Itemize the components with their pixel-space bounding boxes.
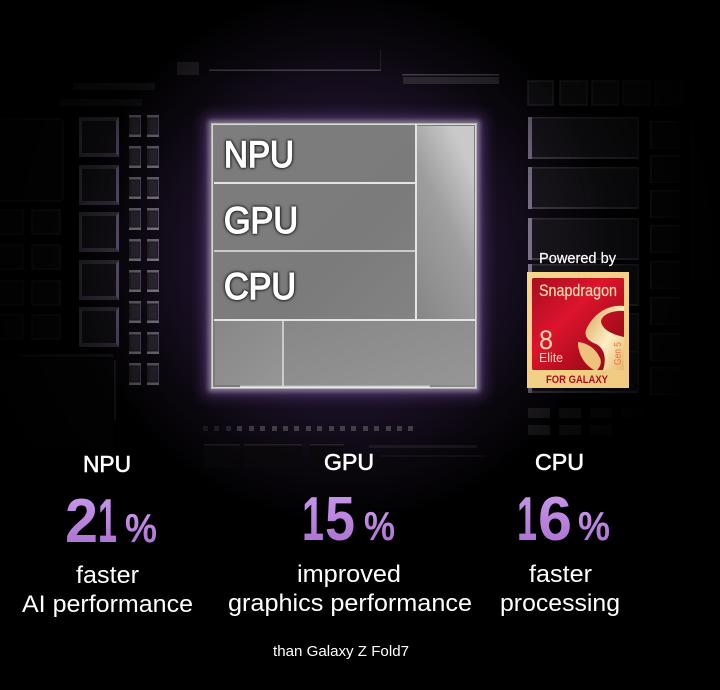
stat: NPU: NPU: [83, 451, 131, 477]
stat: CPU: %: [578, 503, 610, 549]
left capacitor columns: [129, 115, 159, 385]
stat: GPU: GPU: [324, 449, 374, 475]
stat: GPU: improved: [297, 561, 401, 588]
snapdragon badge: FOR GALAXY: [546, 374, 609, 386]
bottom components: [204, 444, 486, 457]
chip label CPU: CPU: [224, 266, 296, 307]
stat: CPU: 6: [538, 485, 572, 554]
stat: NPU: faster: [76, 562, 139, 589]
footnote: than Galaxy Z Fold7: [273, 643, 409, 660]
right big blocks: [528, 117, 639, 393]
stat: NPU: %: [125, 505, 157, 551]
chip label GPU: GPU: [224, 200, 298, 241]
snapdragon badge: Elite: [539, 350, 563, 365]
stat: NPU: [22, 451, 193, 618]
chip glow: [204, 116, 484, 396]
stat: GPU: %: [364, 503, 395, 549]
top components: [177, 50, 499, 84]
chip bottom highlight: [240, 386, 430, 388]
right bottom pads: [528, 408, 581, 435]
right column blocks: [650, 121, 680, 395]
circuit board components: [0, 50, 720, 468]
chip body: [210, 122, 478, 390]
stat: GPU: 1: [302, 485, 324, 554]
stat: CPU: processing: [500, 590, 620, 617]
snapdragon badge: Snapdragon: [539, 282, 617, 300]
stat: NPU: AI performance: [22, 591, 193, 618]
stat: GPU: graphics performance: [228, 590, 472, 617]
far right blocks: [692, 119, 720, 279]
left large squares: [79, 117, 119, 347]
stat: NPU: 1: [98, 487, 117, 556]
stat: CPU: [500, 449, 620, 617]
left small grid: [0, 210, 60, 339]
processor chip: [204, 116, 484, 396]
top-left pads: [99, 83, 155, 106]
chip label NPU: NPU: [224, 134, 294, 175]
stat: GPU: [228, 449, 472, 617]
snapdragon badge: 8: [539, 325, 553, 355]
lower panels: [215, 321, 282, 385]
right panel: [417, 126, 474, 319]
bottom pad row: [203, 426, 413, 431]
snapdragon badge: [527, 272, 629, 388]
snapdragon badge: Gen 5: [613, 342, 624, 365]
stat: NPU: 2: [65, 487, 98, 556]
stat: CPU: faster: [529, 561, 592, 588]
left outer chip: [16, 118, 64, 202]
snapdragon swirl logo: [578, 306, 624, 370]
stat: GPU: 5: [325, 485, 355, 554]
powered by label: Powered by: [539, 250, 616, 267]
stat: CPU: CPU: [535, 449, 584, 475]
chip dividers: [214, 124, 475, 386]
right top row: [528, 80, 641, 106]
lower left IC: [50, 354, 116, 420]
stat: CPU: 1: [517, 485, 537, 554]
